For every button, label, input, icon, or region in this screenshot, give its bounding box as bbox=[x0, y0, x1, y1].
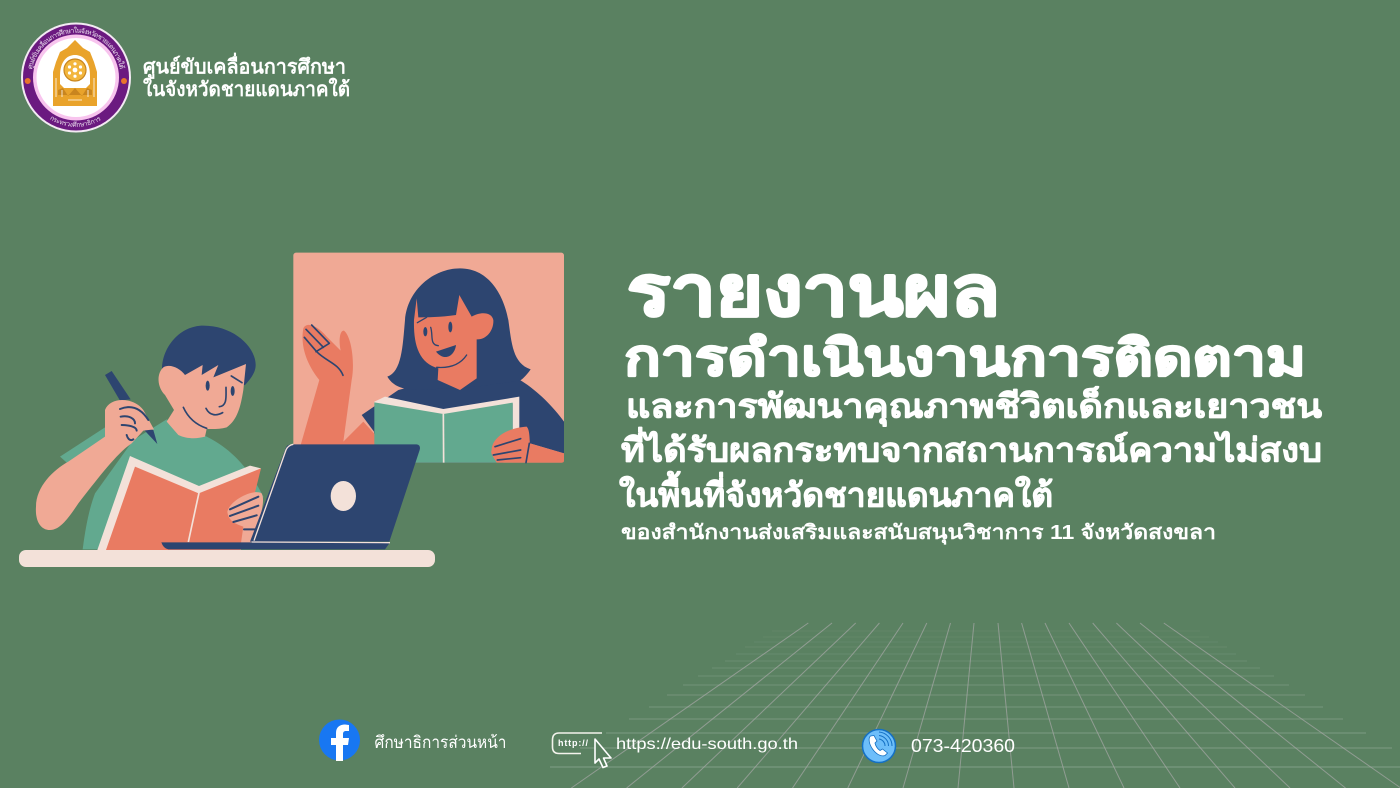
title: main report heading: การดำเนินงานการติดตาม bbox=[624, 330, 1306, 386]
footer: Facebook contact: ศึกษาธิการส่วนหน้า bbox=[374, 733, 506, 752]
boy arm and hand bbox=[36, 400, 154, 530]
title: main report heading: รายงานผล bbox=[627, 253, 1000, 330]
icon: http cursor: http:// bbox=[558, 738, 588, 748]
reading hand bbox=[491, 427, 564, 463]
footer: telephone contact: 073-420360 bbox=[911, 736, 1015, 756]
title: main report heading: ของสำนักงานส่งเสริมและสนับสนุนวิชาการ 11 จังหวัดสงขลา bbox=[621, 522, 1216, 545]
panel: salmon video frame bbox=[293, 253, 564, 463]
icon: phone bbox=[862, 730, 896, 762]
icon: golden emblem bbox=[53, 40, 97, 106]
footer: website contact: https://edu-south.go.th bbox=[616, 736, 798, 753]
book: green open book bbox=[374, 397, 519, 463]
footer: website contact bbox=[552, 733, 798, 768]
table top bbox=[19, 550, 435, 567]
title: main report heading: ในพื้นที่จังหวัดชายแดนภาคใต้ bbox=[619, 470, 1053, 514]
logo: Ministry of Education seal bbox=[21, 22, 131, 132]
title: main report heading: ที่ได้รับผลกระทบจากสถานการณ์ความไม่สงบ bbox=[621, 426, 1322, 468]
boy head bbox=[159, 326, 256, 438]
illustration: boy writing and reading bbox=[36, 326, 263, 550]
boy shirt bbox=[60, 419, 263, 549]
book: orange open book bbox=[97, 456, 261, 550]
logo: Ministry of Education seal: กระทรวงศึกษาธิการ bbox=[50, 116, 100, 127]
icon: facebook bbox=[319, 720, 360, 761]
footer: telephone contact bbox=[862, 730, 1015, 762]
logo: Ministry of Education seal: ศูนย์ขับเคลื่อนการศึกษาในจังหวัดชายแดนภาคใต้ bbox=[28, 26, 126, 69]
boy reading hand bbox=[227, 492, 263, 550]
pen bbox=[105, 371, 157, 444]
header: organisation name: ศูนย์ขับเคลื่อนการศึกษา bbox=[143, 52, 346, 80]
illustration: girl in video frame bbox=[293, 253, 564, 463]
icon: http cursor bbox=[552, 733, 611, 768]
title: main report heading bbox=[619, 253, 1322, 545]
header: organisation name: ในจังหวัดชายแดนภาคใต้ bbox=[143, 77, 350, 101]
raised arm and hand bbox=[301, 325, 380, 453]
illustration: laptop bbox=[161, 444, 420, 549]
girl body and hair bbox=[301, 268, 564, 463]
header: organisation name bbox=[143, 52, 350, 101]
title: main report heading: และการพัฒนาคุณภาพชีวิตเด็กและเยาวชน bbox=[626, 386, 1322, 428]
footer: Facebook contact bbox=[319, 720, 506, 761]
